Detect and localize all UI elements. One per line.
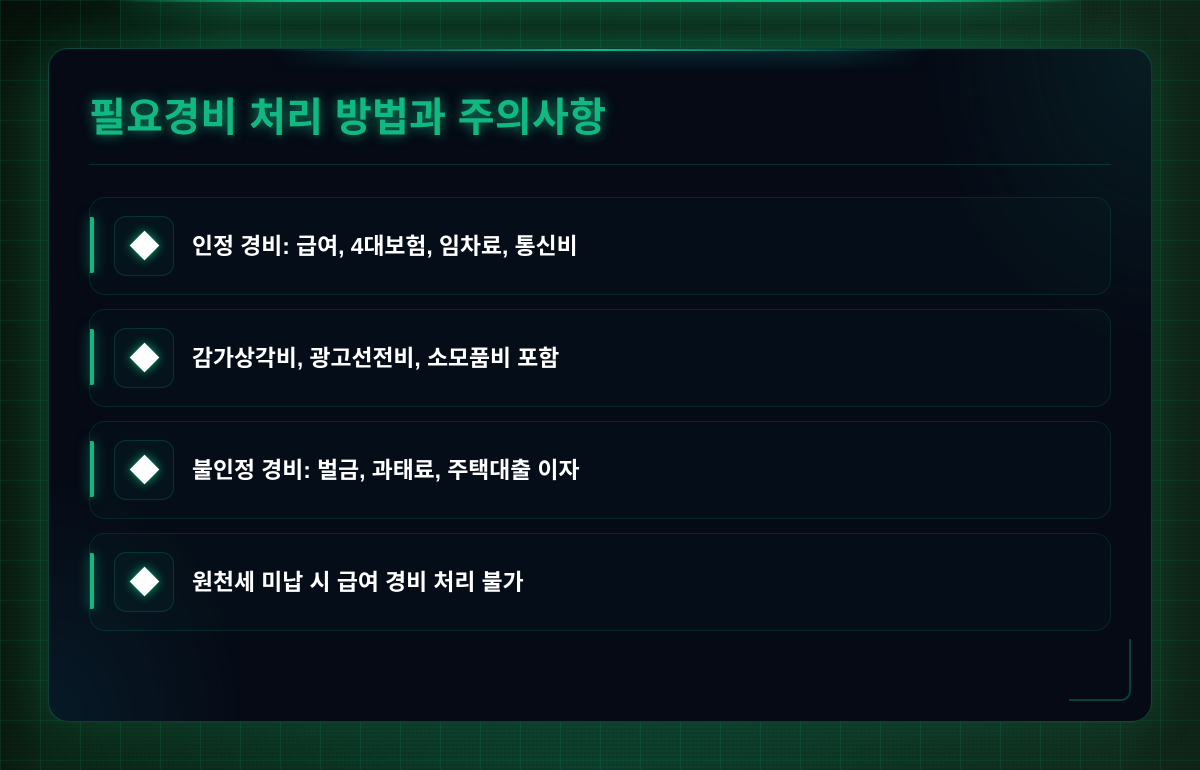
- card top accent line: [270, 49, 930, 51]
- accent bar 2: [90, 329, 94, 385]
- icon: diamond 3: [114, 440, 174, 500]
- list item 3: [89, 421, 1111, 519]
- item text 3: 불인정 경비: 벌금, 과태료, 주택대출 이자: [192, 457, 580, 483]
- list item 2: [89, 309, 1111, 407]
- icon: diamond 4: [114, 552, 174, 612]
- item text 2: 감가상각비, 광고선전비, 소모품비 포함: [192, 345, 559, 371]
- top glow bar: [120, 0, 1080, 2]
- item text 4: 원천세 미납 시 급여 경비 처리 불가: [192, 569, 524, 595]
- list item 4: [89, 533, 1111, 631]
- accent bar 3: [90, 441, 94, 497]
- title: 필요경비 처리 방법과 주의사항: [89, 96, 606, 140]
- icon: diamond 1: [114, 216, 174, 276]
- list item 1: [89, 197, 1111, 295]
- corner bracket: [1069, 639, 1131, 701]
- icon: diamond 2: [114, 328, 174, 388]
- accent bar 1: [90, 217, 94, 273]
- item text 1: 인정 경비: 급여, 4대보험, 임차료, 통신비: [192, 233, 578, 259]
- accent bar 4: [90, 553, 94, 609]
